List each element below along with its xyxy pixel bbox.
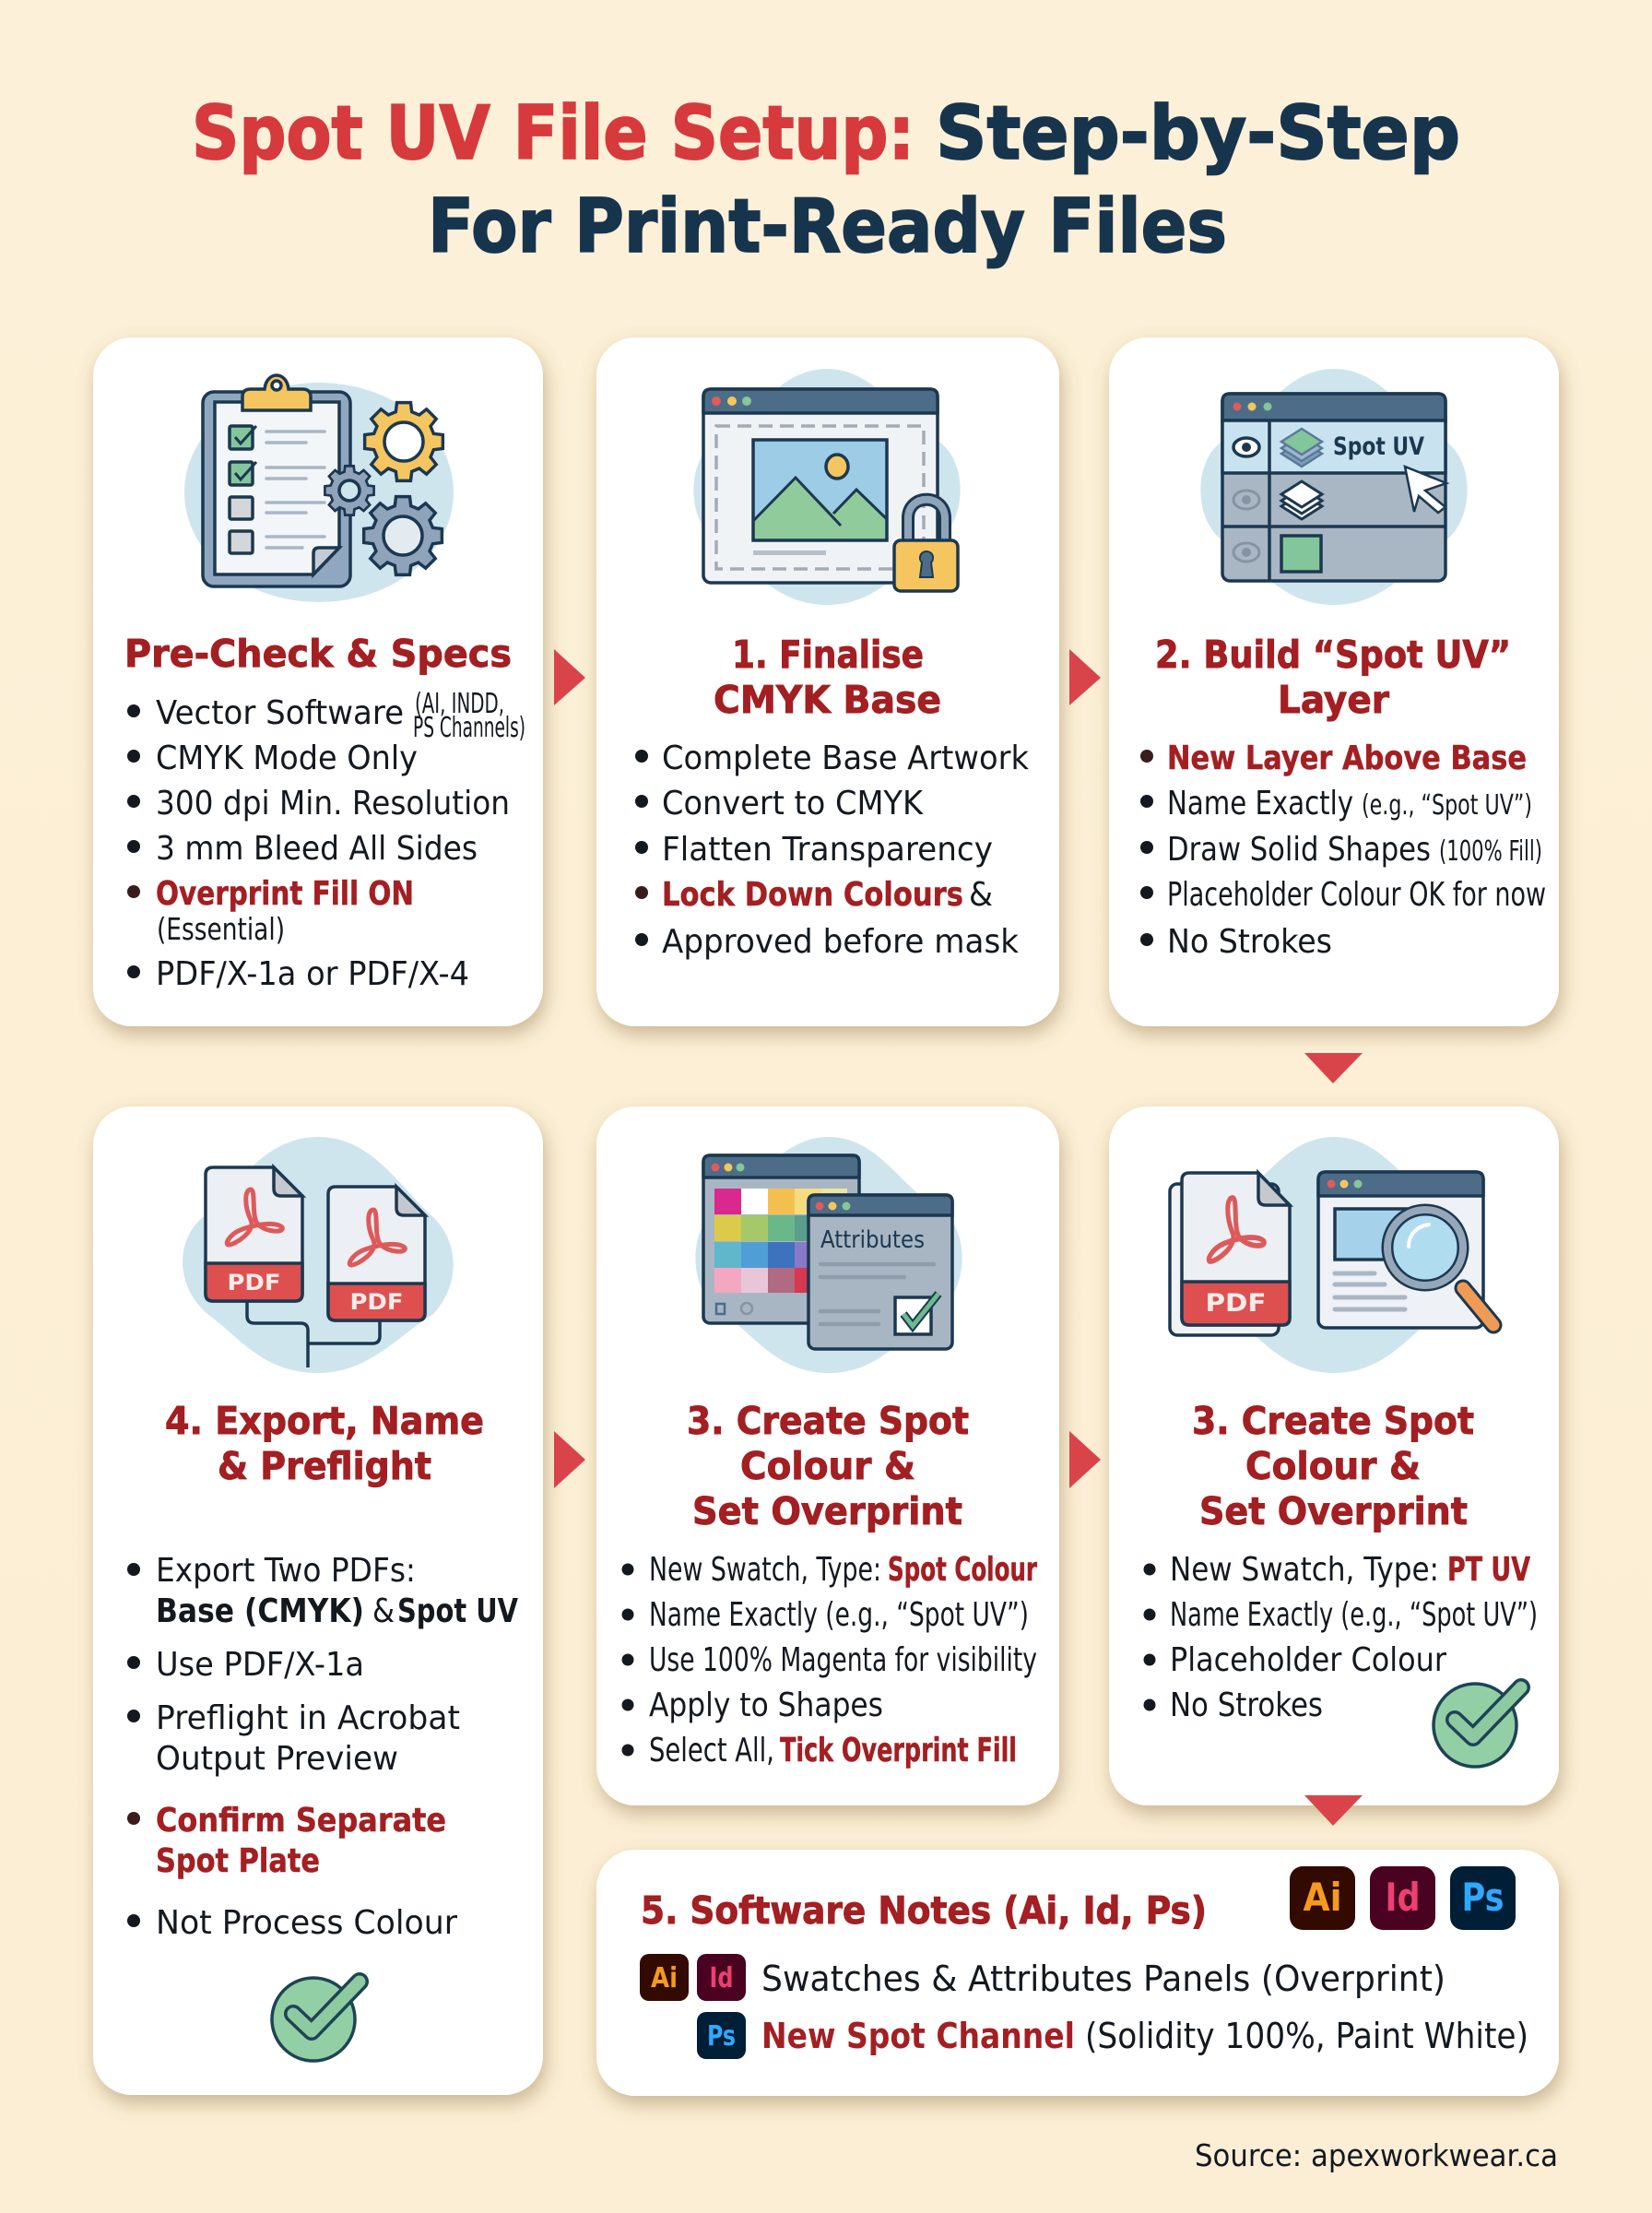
bullet list: & (372, 1592, 395, 1630)
heading: Set Overprint (1199, 1489, 1468, 1533)
heading: 3. Create Spot (687, 1399, 969, 1443)
bullet list: Spot Colour (888, 1551, 1037, 1589)
icon: InDesign badge: Id (1385, 1875, 1420, 1920)
bullet list: Tick Overprint Fill (780, 1732, 1017, 1769)
heading: 2. Build “Spot UV” (1155, 633, 1511, 677)
bullet list: Apply to Shapes (649, 1686, 883, 1724)
bullet list: New Swatch, Type: (649, 1551, 881, 1589)
heading (165, 1399, 484, 1488)
bullet list: Placeholder Colour (1170, 1641, 1446, 1679)
bullet list: Output Preview (156, 1740, 398, 1778)
icon: PDF with magnified window (1170, 1137, 1493, 1373)
icon: locked artwork window (693, 369, 961, 605)
icon: Photoshop badge: Ps (1462, 1875, 1504, 1920)
bullet list: No Strokes (1167, 923, 1332, 961)
icon: clipboard checklist with gears (184, 375, 454, 602)
arrow: step 2 down to step 3 (1304, 1053, 1363, 1083)
panel: software notes (596, 1850, 1559, 2096)
bullet list: Lock Down Colours (662, 876, 963, 914)
panel: step 4 export, name and preflight (93, 1106, 543, 2095)
bullet list: New Layer Above Base (1167, 740, 1527, 777)
title: For Print-Ready Files (428, 183, 1227, 269)
icon: two PDF files joined (183, 1137, 454, 1373)
icon: two PDF files joined: PDF (227, 1270, 280, 1296)
bullet list: Convert to CMYK (662, 785, 924, 822)
icon: swatches and attributes panels (695, 1137, 962, 1373)
bullet list (1140, 740, 1546, 961)
bullet list: New Swatch, Type: (1170, 1551, 1439, 1589)
bullet list: Confirm Separate (156, 1802, 446, 1840)
bullet list: PT UV (1447, 1551, 1530, 1589)
title: Spot UV File Setup: (192, 90, 914, 176)
note row: Ps spot channel: (Solidity 100%, Paint White) (1085, 2016, 1528, 2056)
heading: Layer (1278, 678, 1390, 722)
heading (687, 1399, 969, 1533)
arrow: between swatches and preview panels (1069, 1431, 1101, 1488)
icon: InDesign badge (1370, 1866, 1435, 1930)
panel: step 1 finalise CMYK base (596, 337, 1059, 1026)
bullet list: No Strokes (1170, 1686, 1323, 1724)
bullet list: Overprint Fill ON (156, 875, 414, 913)
bullet list: Draw Solid Shapes (1167, 831, 1431, 869)
arrow: step 1 to step 2 (1069, 649, 1101, 705)
bullet list: (Essential) (157, 911, 285, 947)
heading: Pre-Check & Specs (124, 632, 512, 676)
icon: swatches and attributes panels: Attributes (820, 1226, 925, 1254)
bullet list: PDF/X-1a or PDF/X-4 (156, 955, 469, 993)
panel: step 3 create spot colour, swatches (596, 1106, 1059, 1805)
icon: green check badge (1434, 1684, 1521, 1767)
arrow: pre-check to step 1 (554, 649, 585, 705)
icon: Photoshop badge (1450, 1866, 1516, 1930)
bullet list: (e.g., “Spot UV”) (1362, 789, 1532, 822)
heading (1192, 1399, 1474, 1533)
bullet list: 3 mm Bleed All Sides (156, 830, 478, 868)
bullet list: Select All, (649, 1732, 774, 1769)
bullet list: Flatten Transparency (662, 831, 993, 869)
bullet list (127, 1552, 518, 1942)
title: Step-by-Step (936, 90, 1460, 176)
bullet list (127, 688, 525, 993)
heading: CMYK Base (714, 678, 941, 722)
icon: layers panel with cursor: Spot UV (1333, 432, 1424, 461)
bullet list: Export Two PDFs: (156, 1552, 416, 1590)
bullet list: 300 dpi Min. Resolution (156, 785, 510, 822)
heading: 1. Finalise (732, 633, 924, 677)
note row: Ai and Id swatches: Swatches & Attributes Panels (Overprint) (761, 1959, 1446, 1999)
arrow: step 3 to step 4 direction marker (554, 1431, 585, 1488)
heading: 5. Software Notes (Ai, Id, Ps) (641, 1888, 1207, 1933)
note row: Ai and Id swatches: Ai (651, 1962, 678, 1994)
icon: two PDF files joined: PDF (350, 1289, 404, 1315)
bullet list (621, 1551, 1037, 1769)
note row: Ps spot channel: Ps (707, 2020, 736, 2053)
note row: Ps spot channel: New Spot Channel (761, 2016, 1075, 2056)
title (192, 90, 1460, 269)
heading (1155, 633, 1511, 722)
bullet list: Name Exactly (1167, 785, 1353, 822)
source credit: Source: apexworkwear.ca (1195, 2137, 1558, 2173)
bullet list: & (969, 876, 993, 914)
note row: Ai and Id swatches: Id (710, 1962, 734, 1994)
panel: step 2 build spot UV layer (1109, 337, 1559, 1026)
bullet list: Name Exactly (e.g., “Spot UV”) (649, 1596, 1029, 1634)
icon: PDF with magnified window: PDF (1206, 1289, 1267, 1318)
bullet list: (100% Fill) (1439, 835, 1542, 868)
bullet list: Vector Software (156, 694, 404, 732)
panel: pre-check and specs (93, 337, 543, 1026)
note row: Ps spot channel (697, 2012, 1528, 2059)
bullet list: Approved before mask (662, 923, 1019, 961)
heading: Colour & (1245, 1444, 1421, 1488)
bullet list: (AI, INDD, (415, 688, 504, 720)
bullet list: Spot UV (397, 1592, 518, 1630)
heading (714, 633, 941, 722)
icon: Illustrator badge (1290, 1866, 1355, 1930)
heading: 4. Export, Name (165, 1399, 484, 1443)
bullet list: Use 100% Magenta for visibility (649, 1641, 1037, 1679)
arrow: down to software notes (1304, 1795, 1363, 1826)
bullet list (1143, 1551, 1538, 1724)
bullet list: Not Process Colour (156, 1904, 457, 1942)
icon: green check badge (272, 1978, 360, 2061)
heading: & Preflight (218, 1444, 431, 1488)
bullet list: Use PDF/X-1a (156, 1646, 364, 1684)
bullet list (635, 740, 1029, 961)
panel: step 3 create spot colour, preview (1109, 1106, 1559, 1805)
bullet list: Spot Plate (156, 1842, 320, 1880)
bullet list: Complete Base Artwork (662, 740, 1029, 777)
icon: layers panel with cursor (1200, 369, 1468, 605)
heading: 3. Create Spot (1192, 1399, 1474, 1443)
bullet list: Base (CMYK) (156, 1592, 364, 1630)
bullet list: Preflight in Acrobat (156, 1699, 460, 1737)
icon: Illustrator badge: Ai (1304, 1875, 1342, 1920)
heading: Set Overprint (692, 1489, 962, 1533)
bullet list: PS Channels) (413, 712, 525, 744)
bullet list: CMYK Mode Only (156, 740, 418, 777)
heading: Colour & (740, 1444, 915, 1488)
